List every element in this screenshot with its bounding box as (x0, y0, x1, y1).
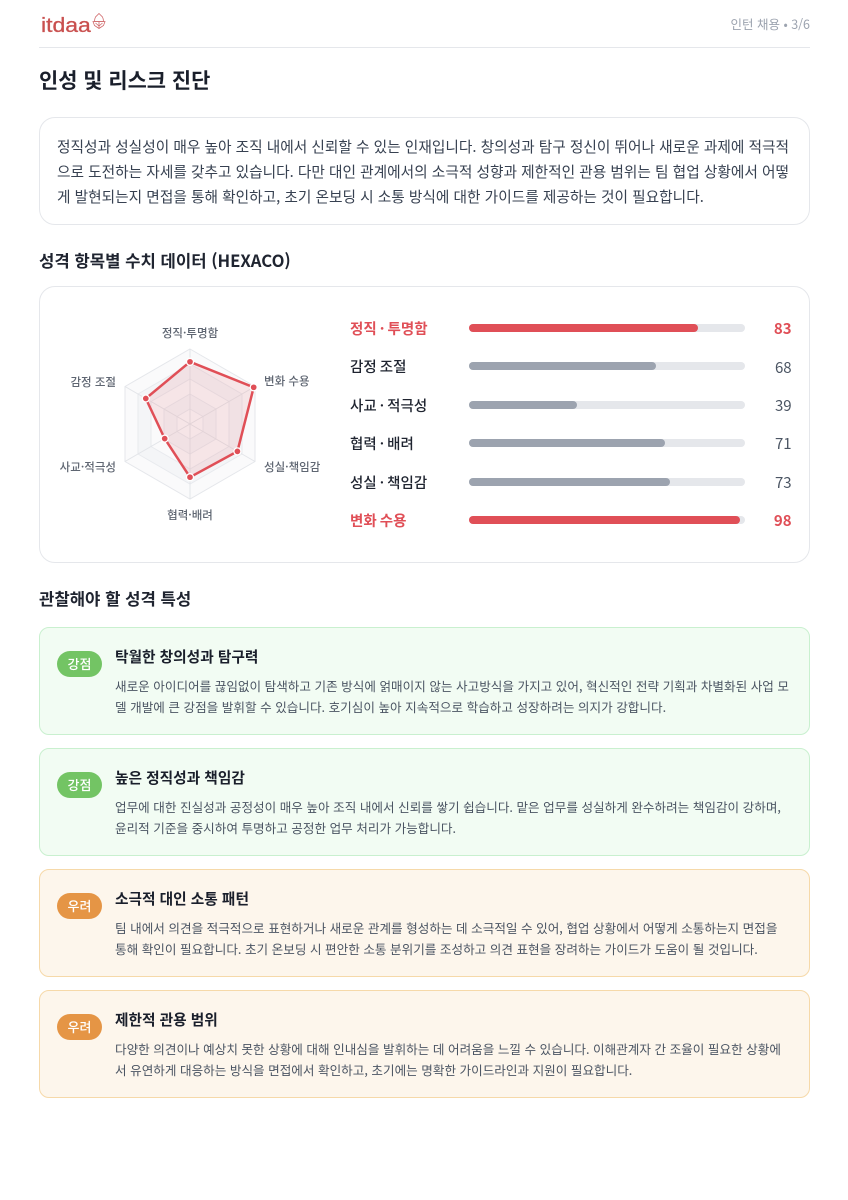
card: 소극적 대인 소통 패턴: 우려 (68, 896, 91, 915)
bar: 협력·배려: 71 (775, 433, 792, 454)
card: 높은 정직성과 책임감: 윤리적 기준을 중시하여 투명하고 공정한 업무 처리가 가능합니다. (115, 818, 456, 837)
bar: 성실·책임감 (350, 472, 792, 493)
card: 탁월한 창의성과 탐구력: 델 개발에 큰 강점을 발휘할 수 있습니다. 호기심이 높아 지속적으로 학습하고 성장하려는 의지가 강합니다. (115, 697, 666, 716)
score bars (350, 318, 792, 531)
bar: 변화 수용: 98 (774, 510, 792, 531)
bar: 변화 수용 (350, 510, 792, 531)
bar: 성실·책임감: 성실 · 책임감 (350, 472, 427, 493)
radar axis labels: 성실·책임감 (264, 459, 321, 475)
radar axis labels: 협력·배려 (167, 507, 213, 523)
bar: 감정 조절 (350, 356, 792, 378)
card: 탁월한 창의성과 탐구력 (39, 627, 810, 735)
card: 소극적 대인 소통 패턴: 팀 내에서 의견을 적극적으로 표현하거나 새로운 관계를 형성하는 데 소극적일 수 있어, 협업 상황에서 어떻게 소통하는지 면접을 (115, 918, 777, 937)
summary panel (39, 117, 810, 225)
logo (41, 13, 106, 36)
card: 높은 정직성과 책임감: 강점 (68, 775, 91, 794)
bar: 정직·투명함 (350, 318, 792, 339)
card: 소극적 대인 소통 패턴: 통해 확인이 필요합니다. 초기 온보딩 시 편안한 소통 분위기를 조성하고 의견 표현을 장려하는 가이드가 도움이 될 것입니다. (115, 939, 758, 958)
card: 소극적 대인 소통 패턴 (39, 869, 810, 977)
bar: 감정 조절: 감정 조절 (350, 356, 406, 377)
card: 제한적 관용 범위: 우려 (68, 1017, 91, 1036)
card: 탁월한 창의성과 탐구력: 강점 (68, 654, 91, 673)
card: 제한적 관용 범위: 다양한 의견이나 예상치 못한 상황에 대해 인내심을 발휘하는 데 어려움을 느낄 수 있습니다. 이해관계자 간 조율이 필요한 상황에 (115, 1039, 781, 1058)
radar data polygon (146, 362, 254, 477)
summary text (57, 136, 789, 207)
summary text: 정직성과 성실성이 매우 높아 조직 내에서 신뢰할 수 있는 인재입니다. 창의성과 탐구 정신이 뛰어나 새로운 과제에 적극적 (57, 136, 789, 157)
radar chart (60, 325, 321, 523)
bar: 사교·적극성 (350, 395, 792, 416)
page indicator: 인턴 채용 • 3/6 (730, 14, 810, 33)
bar: 사교·적극성: 사교 · 적극성 (350, 395, 427, 416)
section heading: traits: 관찰해야 할 성격 특성 (39, 586, 191, 610)
radar axis labels: 정직·투명함 (162, 325, 219, 341)
card: 제한적 관용 범위 (39, 990, 810, 1098)
radar axis labels (60, 325, 321, 523)
summary text: 게 발현되는지 면접을 통해 확인하고, 초기 온보딩 시 소통 방식에 대한 가이드를 제공하는 것이 필요합니다. (57, 186, 704, 207)
card: 탁월한 창의성과 탐구력: 새로운 아이디어를 끊임없이 탐색하고 기존 방식에 얽매이지 않는 사고방식을 가지고 있어, 혁신적인 전략 기획과 차별화된 사업 모 (115, 676, 789, 695)
section heading: HEXACO: 성격 항목별 수치 데이터 (HEXACO) (39, 248, 291, 272)
radar axis labels: 변화 수용 (264, 373, 310, 389)
logo icon (92, 13, 106, 29)
bar: 협력·배려: 협력 · 배려 (350, 433, 414, 454)
bar: 사교·적극성: 39 (775, 395, 792, 416)
card: 제한적 관용 범위: 제한적 관용 범위 (115, 1009, 218, 1030)
card: 높은 정직성과 책임감: 업무에 대한 진실성과 공정성이 매우 높아 조직 내에서 신뢰를 쌓기 쉽습니다. 맡은 업무를 성실하게 완수하려는 책임감이 강하며, (115, 797, 781, 816)
radar axis labels: 사교·적극성 (60, 459, 116, 475)
card: 높은 정직성과 책임감: 높은 정직성과 책임감 (115, 767, 245, 788)
bar: 협력·배려 (350, 433, 792, 454)
bar: 성실·책임감: 73 (775, 472, 792, 493)
logo wordmark: itdaa (41, 14, 91, 36)
radar axis labels: 감정 조절 (70, 374, 116, 390)
bar: 변화 수용: 변화 수용 (350, 510, 406, 531)
panel: HEXACO data (39, 286, 810, 563)
card: 탁월한 창의성과 탐구력: 탁월한 창의성과 탐구력 (115, 646, 258, 667)
bar: 정직·투명함: 83 (774, 318, 792, 339)
bar: 정직·투명함: 정직 · 투명함 (350, 318, 428, 339)
card: 소극적 대인 소통 패턴: 소극적 대인 소통 패턴 (115, 888, 249, 909)
bar: 감정 조절: 68 (775, 357, 792, 378)
card: 제한적 관용 범위: 서 유연하게 대응하는 방식을 면접에서 확인하고, 초기에는 명확한 가이드라인과 지원이 필요합니다. (115, 1060, 632, 1079)
card: 높은 정직성과 책임감 (39, 748, 810, 856)
radar data points (142, 358, 257, 481)
page title: 인성 및 리스크 진단 (39, 65, 210, 95)
summary text: 으로 도전하는 자세를 갖추고 있습니다. 다만 대인 관계에서의 소극적 성향과 제한적인 관용 범위는 팀 협업 상황에서 어떻 (57, 161, 789, 182)
